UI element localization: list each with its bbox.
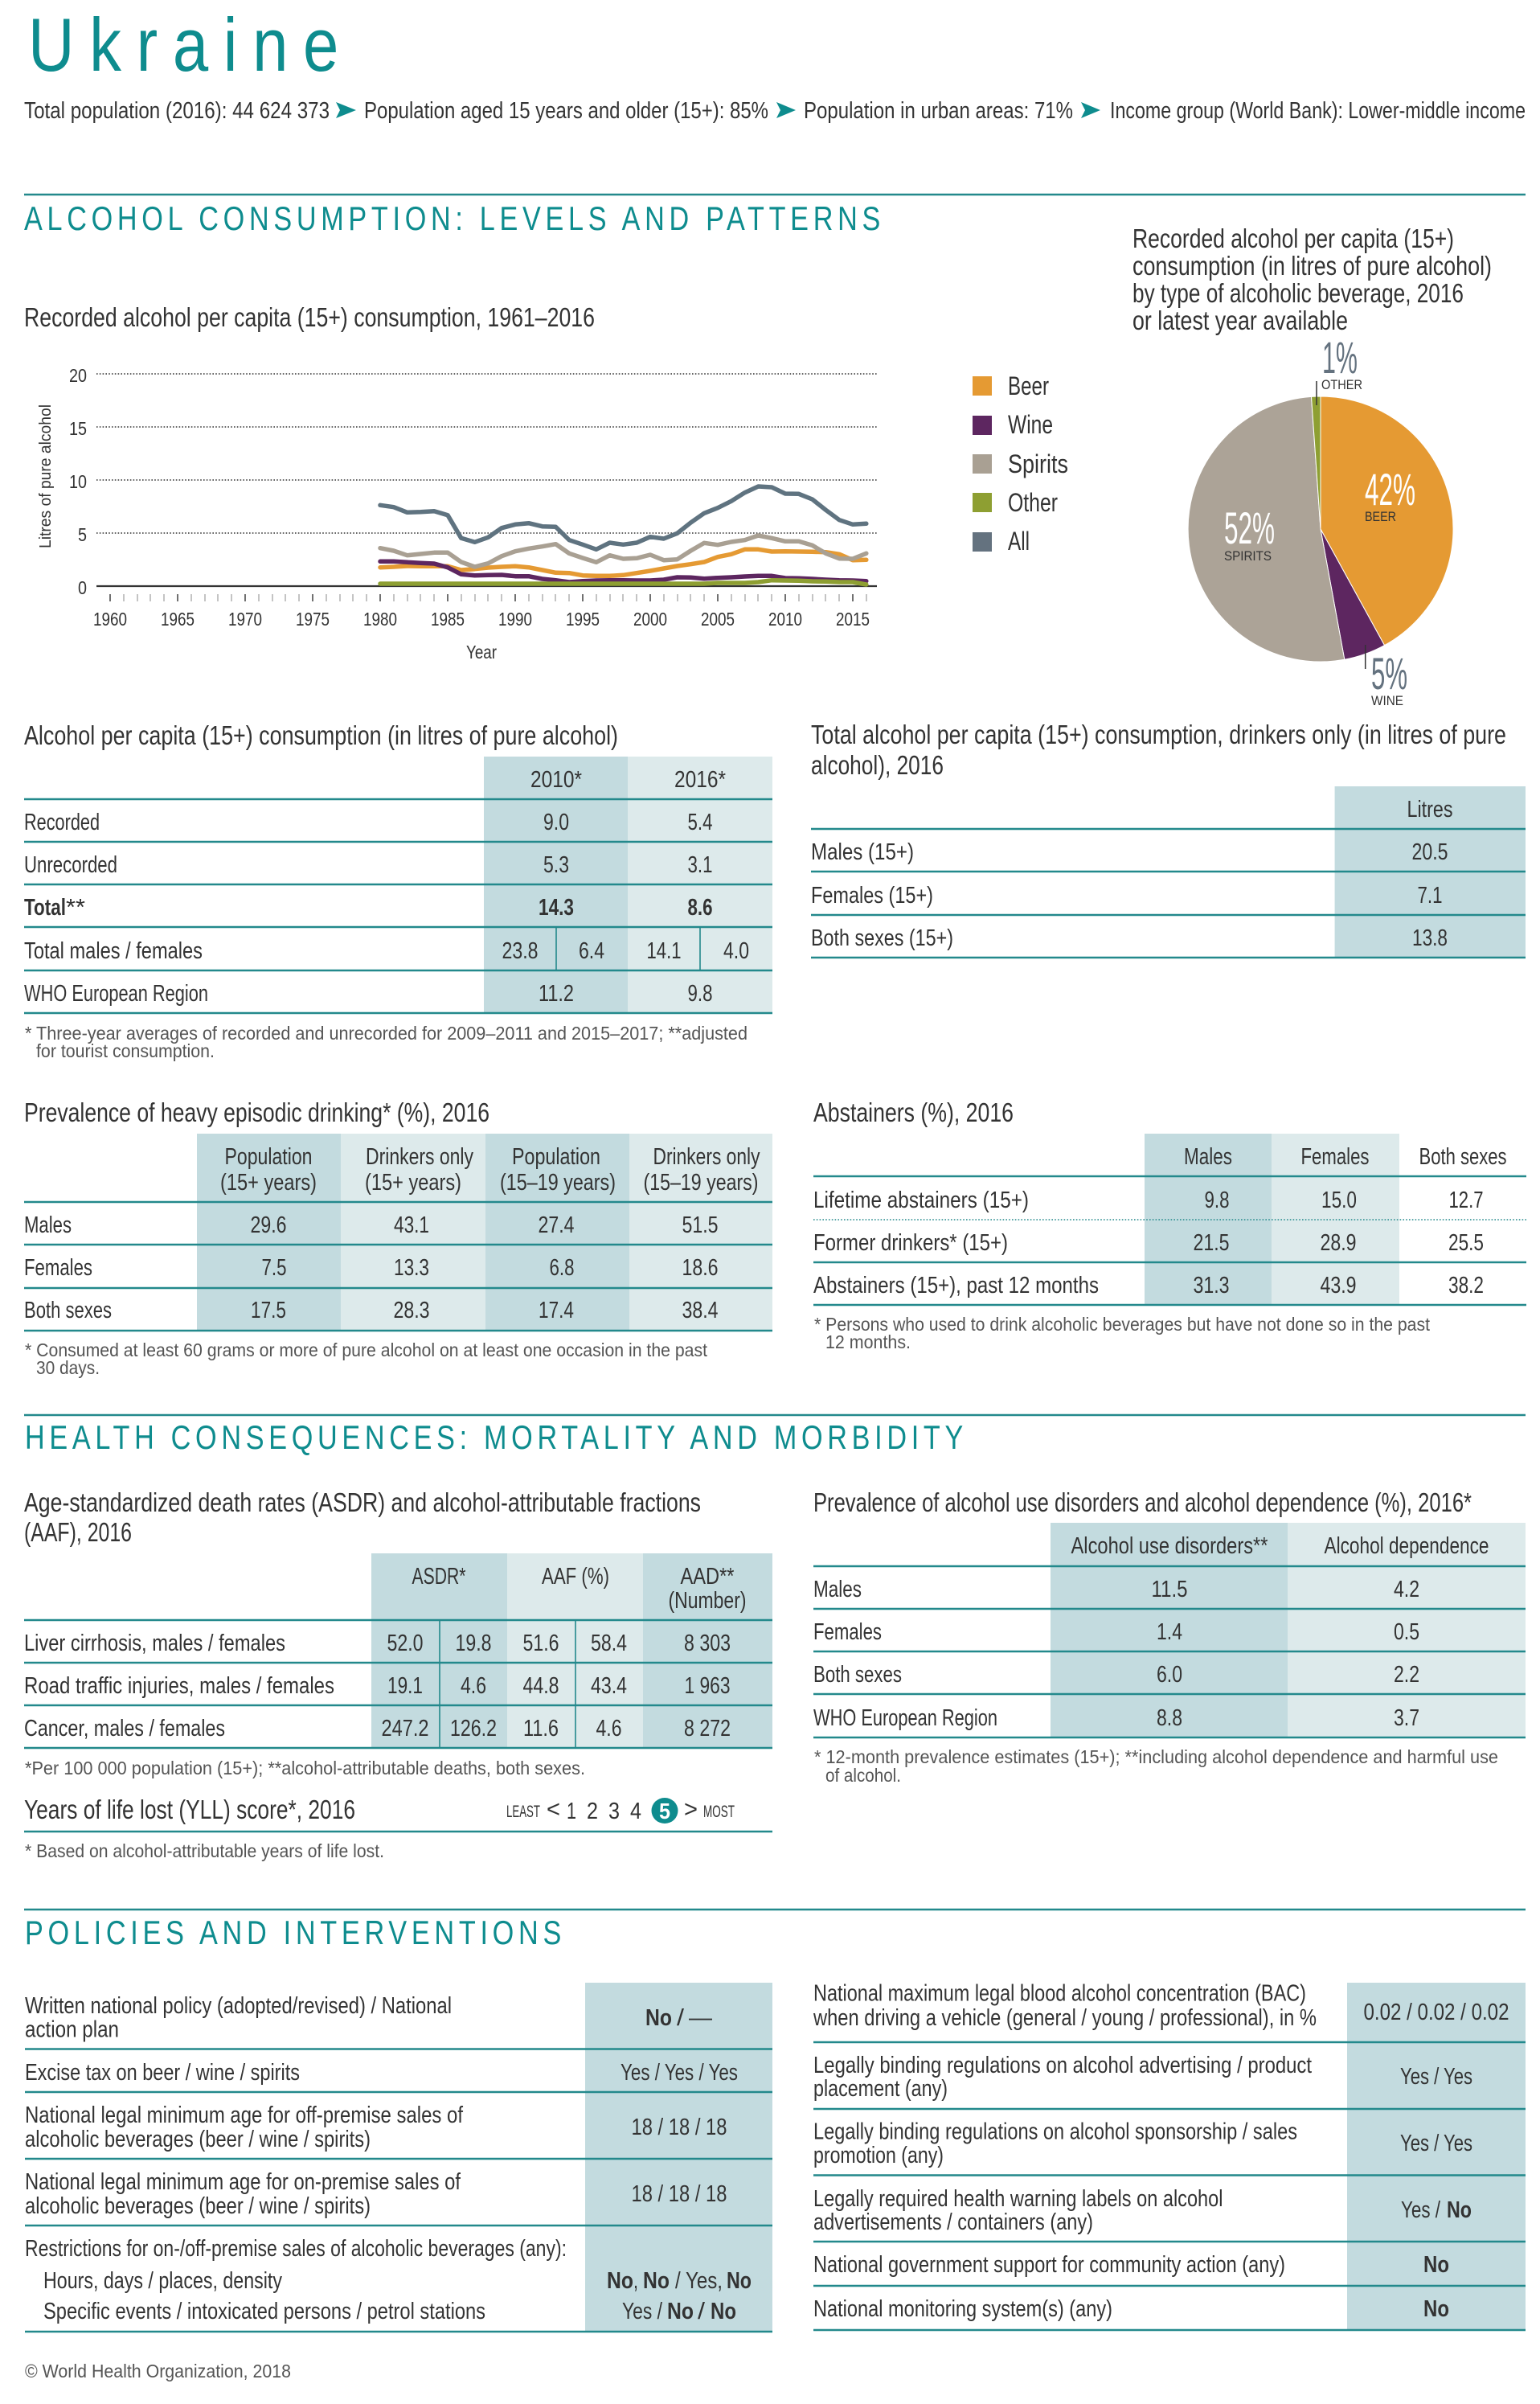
header row: Drinkers only [653,1144,760,1170]
row: both sexes: Both sexes [813,1662,902,1688]
y axis labels: 15 [69,418,87,439]
row: females: 7.5 [262,1255,286,1281]
row: minimum age off-premise: alcoholic beverages (beer / wine / spirits) [25,2127,371,2152]
country summary line: Total population (2016): 44 624 373 [24,98,330,124]
row: total [24,895,712,921]
row: males: Males [24,1212,72,1238]
row: written national policy [25,1993,712,2042]
row: WHO European Region [24,981,712,1007]
score scale: > [684,1796,698,1823]
row: lifetime abstainers: 12.7 [1448,1188,1484,1213]
header row: (15+ years) [220,1170,317,1196]
row: health warning labels [813,2186,1472,2235]
x axis labels: 2010 [768,609,802,630]
score scale: < [547,1796,560,1823]
header row: Both sexes [1419,1144,1506,1170]
row: both sexes: 6.0 [1157,1662,1182,1688]
header row: (15–19 years) [643,1170,759,1196]
row: abstainers past 12 months: Abstainers (15+), past 12 months [813,1273,1099,1298]
row: blood alcohol concentration [813,1981,1509,2031]
row: written national policy: No [645,2005,672,2031]
row: advertising regulations: Yes / Yes [1400,2064,1472,2090]
row: blood alcohol concentration: when driving a vehicle (general / young / professional), in % [813,2005,1317,2031]
pie chart heading [1132,224,1492,335]
panel: policies right [813,1981,1526,2330]
panel: years of life lost score [24,1795,772,1861]
row: males: 11.5 [1151,1577,1188,1602]
pie label: spirits: 52% [1224,503,1275,553]
row: females: 0.5 [1394,1619,1419,1645]
header row: Males [1184,1144,1232,1170]
row: females: Females (15+) [811,883,933,909]
footnote: * Three-year averages of recorded and unrecorded for 2009–2011 and 2015–2017; **adjusted [25,1023,747,1044]
row: liver cirrhosis: 52.0 [387,1631,423,1656]
row: both sexes: 17.5 [251,1298,286,1323]
pie chart: alcohol by beverage type [1188,332,1453,708]
row: cancer: 11.6 [523,1716,559,1741]
x axis title: Year [466,642,497,663]
row: cancer [24,1716,731,1741]
row: sponsorship regulations: Yes / Yes [1400,2131,1472,2156]
pie label: beer: 42% [1365,464,1415,515]
header row: 2010* [530,767,582,793]
header row: (Number) [669,1588,746,1614]
row: both sexes: Both sexes [24,1298,112,1323]
header row: Alcohol use disorders** [1071,1533,1268,1559]
row: abstainers past 12 months: 31.3 [1193,1273,1230,1298]
row: written national policy: — [689,2005,712,2031]
footnote [814,1746,1498,1786]
x axis labels: 1990 [498,609,532,630]
row: males: 20.5 [1411,839,1448,865]
row: sponsorship regulations [813,2119,1472,2168]
section heading: health consequences: HEALTH CONSEQUENCES: MORTALITY AND MORBIDITY [25,1418,968,1456]
row: both sexes: 13.8 [1412,925,1448,951]
country summary line: Population aged 15 years and older (15+): 85% [364,98,768,124]
header row: Drinkers only [366,1144,473,1170]
row: lifetime abstainers: 9.8 [1204,1188,1230,1213]
row: total males / females: 14.1 [646,938,682,964]
table heading [811,720,1506,780]
score scale: 2 [587,1799,598,1824]
pie label: wine: WINE [1371,693,1403,708]
score scale: LEAST [506,1803,540,1821]
row: former drinkers: 28.9 [1320,1230,1357,1256]
score scale: 3 [608,1799,620,1824]
row: females [813,1619,1419,1645]
row: community action: No [1423,2252,1449,2278]
row: total: Total [24,895,66,921]
row: liver cirrhosis: 19.8 [455,1631,492,1656]
row: restrictions on sales: No [643,2268,670,2294]
header row [530,767,726,793]
row: monitoring systems: National monitoring system(s) (any) [813,2296,1112,2322]
table heading [24,1487,701,1547]
row: both sexes [24,1298,719,1323]
panel: alcohol per capita consumption [24,720,772,1061]
row: males [24,1212,719,1238]
row: total males / females [24,938,749,964]
row: liver cirrhosis: 8 303 [684,1631,731,1656]
row: total: 14.3 [539,895,574,921]
header row [1071,1533,1489,1559]
row: abstainers past 12 months: 38.2 [1448,1273,1484,1298]
row: health warning labels: Legally required health warning labels on alcohol [813,2186,1223,2212]
footnote: * Persons who used to drink alcoholic beverages but have not done so in the past [814,1314,1431,1335]
row: WHO European Region [813,1705,1419,1731]
row: restrictions on sales: Restrictions for on-/off-premise sales of alcoholic beverages (any): [25,2236,567,2262]
row: cancer: 247.2 [381,1716,429,1741]
row: males [811,839,1448,865]
row: recorded: Recorded [24,810,100,835]
row: advertising regulations [813,2053,1472,2102]
highlighted score: 5 [659,1799,670,1824]
pie label: spirits [1224,503,1275,564]
row: restrictions on sales [25,2236,752,2324]
row: restrictions on sales: Hours, days / places, density [43,2268,282,2294]
pie label: wine [1371,648,1407,708]
row: lifetime abstainers [813,1188,1484,1213]
row: monitoring systems [813,2296,1449,2322]
row: both sexes: 17.4 [539,1298,574,1323]
pie chart heading: or latest year available [1132,306,1348,335]
row: total: 8.6 [688,895,712,921]
row: both sexes: 28.3 [394,1298,429,1323]
pie label: other: OTHER [1321,377,1362,392]
row: road traffic injuries: 1 963 [685,1673,730,1699]
score scale: 4 [630,1799,641,1824]
panel: death rates and attributable fractions [24,1487,772,1778]
table heading: (AAF), 2016 [24,1517,132,1547]
row: restrictions on sales: No [711,2299,736,2324]
row: minimum age off-premise: 18 / 18 / 18 [632,2115,727,2140]
row: unrecorded [24,852,712,878]
table heading: Abstainers (%), 2016 [813,1097,1014,1127]
row: liver cirrhosis: 58.4 [591,1631,627,1656]
row: minimum age on-premise: alcoholic beverages (beer / wine / spirits) [25,2193,371,2219]
row: restrictions on sales: No [667,2299,694,2324]
x axis labels: 1985 [431,609,465,630]
row: both sexes [813,1662,1419,1688]
row: cancer: 8 272 [684,1716,731,1741]
pie label: other [1321,332,1362,392]
legend: Other [1008,488,1058,517]
x axis labels: 1975 [296,609,330,630]
header row: AAD** [680,1564,735,1590]
row: females: 6.8 [550,1255,574,1281]
row: written national policy: / [677,2005,685,2031]
row: both sexes: 38.4 [682,1298,719,1323]
footnote: 12 months. [825,1331,911,1352]
row: males [813,1577,1419,1602]
header row: Population [225,1144,312,1170]
row: recorded: 5.4 [688,810,712,835]
header row [412,1564,746,1614]
row: females [811,883,1442,909]
pie chart heading: by type of alcoholic beverage, 2016 [1132,278,1464,308]
row: females: 13.3 [394,1255,429,1281]
header row [1184,1144,1506,1170]
x axis labels: 1965 [161,609,195,630]
footnote: of alcohol. [825,1765,901,1786]
line chart heading: Recorded alcohol per capita (15+) consumption, 1961–2016 [24,302,595,332]
row: total males / females: Total males / females [24,938,203,964]
row: restrictions on sales: No [727,2268,752,2294]
footnote [25,1339,708,1378]
header row: 2016* [674,767,726,793]
row: total: ** [66,895,85,921]
row: minimum age on-premise: National legal minimum age for on-premise sales of [25,2169,461,2195]
header row: AAF (%) [542,1564,609,1590]
row: cancer: 4.6 [596,1716,622,1741]
row: written national policy: Written national policy (adopted/revised) / National [25,1993,452,2019]
country summary line [24,98,1526,124]
row: minimum age off-premise: National legal minimum age for off-premise sales of [25,2102,464,2128]
footnote: * Based on alcohol-attributable years of life lost. [25,1840,384,1861]
row: males: 27.4 [539,1212,574,1238]
x axis labels: 1980 [363,609,397,630]
title: Ukraine [28,2,354,87]
row: community action: National government support for community action (any) [813,2252,1285,2278]
panel: drinkers only consumption [811,720,1526,958]
row: unrecorded: 3.1 [688,852,712,878]
y axis title: Litres of pure alcohol [37,404,55,548]
y axis labels: 10 [69,471,87,492]
legend [973,371,1068,556]
row: road traffic injuries: 43.4 [591,1673,627,1699]
row: former drinkers: 21.5 [1193,1230,1230,1256]
row: sponsorship regulations: promotion (any) [813,2143,944,2168]
legend: Wine [1008,410,1053,439]
row: females: 7.1 [1418,883,1442,909]
row: total males / females: 4.0 [723,938,749,964]
row: restrictions on sales: Specific events / intoxicated persons / petrol stations [43,2299,485,2324]
row: WHO European Region: 3.7 [1394,1705,1419,1731]
row: sponsorship regulations: Legally binding regulations on alcohol sponsorship / sales [813,2119,1297,2145]
row: liver cirrhosis: 51.6 [522,1631,559,1656]
row: liver cirrhosis [24,1631,731,1656]
row: restrictions on sales: / [698,2299,706,2324]
table heading: Age-standardized death rates (ASDR) and alcohol-attributable fractions [24,1487,701,1517]
row: lifetime abstainers: Lifetime abstainers (15+) [813,1188,1029,1213]
x axis labels: 1960 [93,609,127,630]
line chart: recorded alcohol per capita 1961-2016 [37,365,877,663]
footnote: * 12-month prevalence estimates (15+); **including alcohol dependence and harmful use [814,1746,1498,1767]
row: abstainers past 12 months [813,1273,1484,1298]
footnote: for tourist consumption. [36,1040,215,1061]
row: former drinkers: 25.5 [1448,1230,1484,1256]
row: unrecorded: Unrecorded [24,852,117,878]
panel: alcohol use disorders [813,1487,1526,1786]
row: total males / females: 6.4 [579,938,604,964]
header cell: Litres [1407,797,1453,823]
row: cancer: Cancer, males / females [24,1716,225,1741]
score scale: 1 [567,1799,576,1824]
row: monitoring systems: No [1423,2296,1449,2322]
x axis labels [93,609,870,630]
row: restrictions on sales: Yes / [622,2299,663,2324]
row: liver cirrhosis: Liver cirrhosis, males / females [24,1631,285,1656]
row: excise tax [25,2060,738,2086]
row: females: 18.6 [682,1255,719,1281]
row: males: 4.2 [1394,1577,1419,1602]
row: former drinkers: Former drinkers* (15+) [813,1230,1008,1256]
row: lifetime abstainers: 15.0 [1321,1188,1357,1213]
heading: Years of life lost (YLL) score*, 2016 [24,1795,355,1824]
row: former drinkers [813,1230,1484,1256]
footnote [25,1023,747,1061]
x axis labels: 1995 [566,609,600,630]
y axis labels: 0 [78,577,87,598]
header row: Population [512,1144,600,1170]
table heading: Prevalence of heavy episodic drinking* (%), 2016 [24,1097,489,1127]
footnote: 30 days. [36,1357,100,1378]
row: recorded [24,810,712,835]
highlighted score [651,1798,678,1824]
score scale [506,1796,735,1824]
x axis labels: 2005 [701,609,735,630]
y axis labels: 5 [78,524,87,545]
footnote: * Consumed at least 60 grams or more of pure alcohol on at least one occasion in the past [25,1339,708,1360]
row: advertising regulations: placement (any) [813,2076,948,2102]
row: excise tax: Excise tax on beer / wine / spirits [25,2060,300,2086]
row: restrictions on sales: / Yes, [675,2268,723,2294]
row: females: 1.4 [1157,1619,1182,1645]
row: road traffic injuries: 4.6 [461,1673,486,1699]
row: road traffic injuries: Road traffic injuries, males / females [24,1673,334,1699]
pie label: wine: 5% [1371,648,1407,699]
row: restrictions on sales: No [607,2268,633,2294]
x axis labels: 1970 [228,609,262,630]
header row: (15–19 years) [500,1170,616,1196]
y axis labels [69,365,87,598]
row: WHO European Region: WHO European Region [24,981,208,1007]
pie label: spirits: SPIRITS [1224,548,1272,564]
section heading: alcohol consumption: ALCOHOL CONSUMPTION: LEVELS AND PATTERNS [24,199,885,237]
pie label: other: 1% [1322,332,1358,383]
row: road traffic injuries [24,1673,730,1699]
row: health warning labels: No [1447,2197,1472,2223]
row: unrecorded: 5.3 [543,852,569,878]
section heading: policies: POLICIES AND INTERVENTIONS [25,1914,566,1951]
row: cancer: 126.2 [450,1716,497,1741]
footnote: *Per 100 000 population (15+); **alcohol-attributable deaths, both sexes. [25,1758,585,1778]
row: advertising regulations: Legally binding regulations on alcohol advertising / product [813,2053,1312,2078]
row: health warning labels: Yes / [1401,2197,1441,2223]
row: females: Females [813,1619,882,1645]
table heading: alcohol), 2016 [811,750,944,780]
legend: Beer [1008,371,1049,400]
panel: heavy episodic drinking [24,1097,772,1378]
row: both sexes [811,925,1448,951]
header row: ASDR* [412,1564,466,1590]
row: both sexes: Both sexes (15+) [811,925,953,951]
header row: Alcohol dependence [1325,1533,1489,1559]
row: road traffic injuries: 44.8 [522,1673,559,1699]
row: females [24,1255,719,1281]
row: minimum age off-premise [25,2102,727,2152]
panel: abstainers [813,1097,1526,1352]
row: females: Females [24,1255,92,1281]
row: excise tax: Yes / Yes / Yes [621,2060,738,2086]
row: males: Males [813,1577,862,1602]
row: road traffic injuries: 19.1 [387,1673,423,1699]
header row [220,1144,760,1196]
row: WHO European Region: 9.8 [688,981,712,1007]
row: males: Males (15+) [811,839,914,865]
row: written national policy: action plan [25,2016,119,2042]
row: WHO European Region: WHO European Region [813,1705,997,1731]
y axis labels: 20 [69,365,87,386]
header row: (15+ years) [365,1170,461,1196]
row: minimum age on-premise [25,2169,727,2219]
row: recorded: 9.0 [543,810,569,835]
row: abstainers past 12 months: 43.9 [1320,1273,1357,1298]
row: minimum age on-premise: 18 / 18 / 18 [632,2181,727,2207]
row: blood alcohol concentration: 0.02 / 0.02 / 0.02 [1363,2000,1509,2025]
series lines: beer, wine, spirits, other, all [380,486,866,585]
legend: All [1008,527,1030,556]
row: males: 43.1 [394,1212,429,1238]
header row: Females [1300,1144,1370,1170]
row: WHO European Region: 8.8 [1157,1705,1182,1731]
copyright: © World Health Organization, 2018 [25,2361,291,2381]
pie chart heading: Recorded alcohol per capita (15+) [1132,224,1454,253]
table heading: Alcohol per capita (15+) consumption (in litres of pure alcohol) [24,720,618,750]
row: blood alcohol concentration: National maximum legal blood alcohol concentration (BAC) [813,1981,1306,2007]
footnote [814,1314,1431,1352]
row: males: 51.5 [682,1212,719,1238]
row: restrictions on sales: , [633,2268,638,2294]
x axis labels: 2015 [836,609,870,630]
legend: Spirits [1008,449,1068,478]
row: WHO European Region: 11.2 [539,981,574,1007]
row: males: 29.6 [251,1212,286,1238]
x axis labels: 2000 [633,609,667,630]
row: both sexes: 2.2 [1394,1662,1419,1688]
panel: policies left [25,1983,772,2332]
row: health warning labels: advertisements / containers (any) [813,2209,1093,2235]
score scale: MOST [703,1803,735,1821]
pie label: beer [1365,464,1415,524]
pie label: beer: BEER [1365,509,1396,524]
country summary line: Population in urban areas: 71% [804,98,1073,124]
row: total males / females: 23.8 [502,938,539,964]
